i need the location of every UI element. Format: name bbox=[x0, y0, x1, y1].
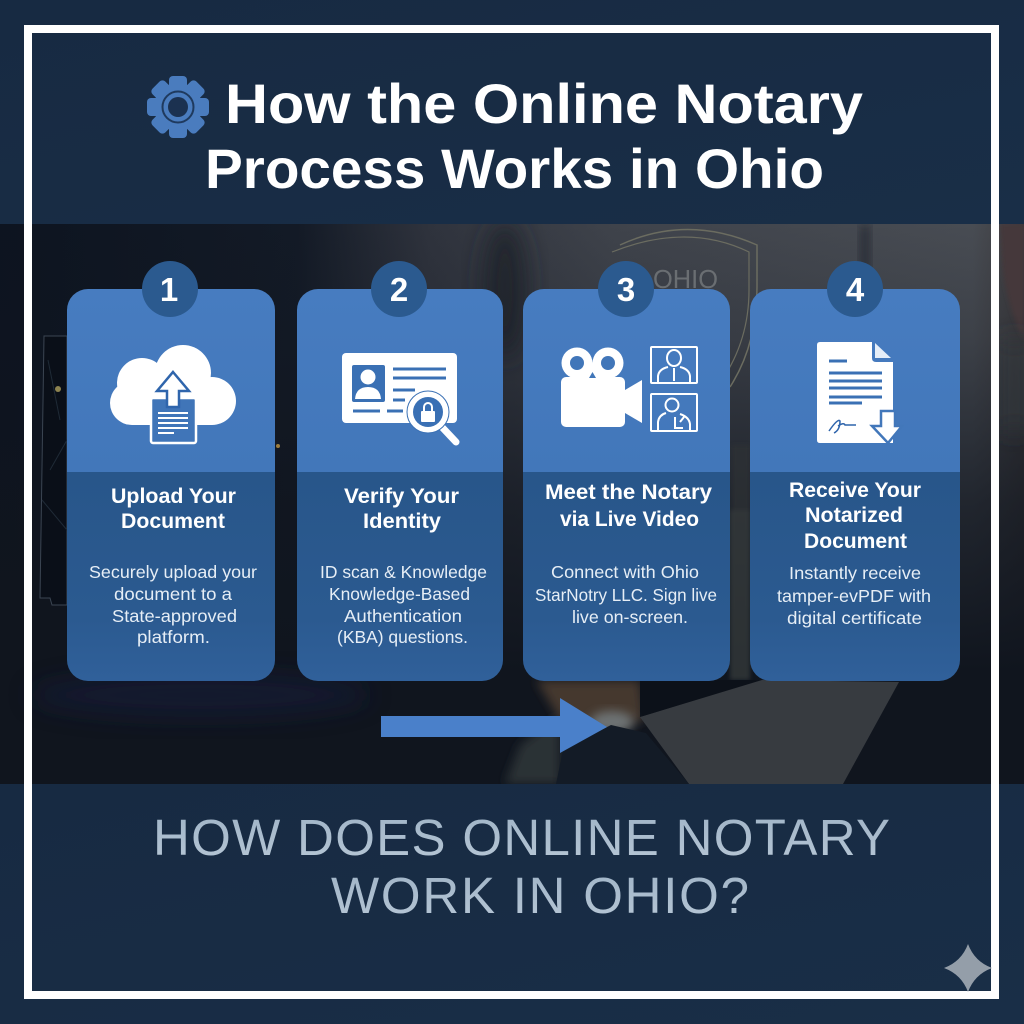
step 1 heading bbox=[111, 485, 236, 533]
step 2 heading bbox=[344, 485, 459, 533]
step 3 heading: via Live Video bbox=[560, 508, 699, 531]
step 3 description: StarNotry LLC. Sign live bbox=[535, 585, 717, 605]
step 2 heading: Verify Your bbox=[344, 485, 459, 508]
step 1 heading: Upload Your bbox=[111, 485, 236, 508]
step 3 description bbox=[535, 562, 717, 627]
step 2 number: 2 bbox=[390, 271, 408, 308]
icon: sparkle bbox=[944, 944, 992, 992]
step 1 description bbox=[89, 562, 257, 647]
icon: cloud upload document bbox=[110, 345, 236, 443]
icon: notarized document with download arrow bbox=[817, 342, 902, 443]
title bbox=[205, 72, 863, 200]
step 2 description: Authentication bbox=[344, 606, 462, 626]
panel: step 4 card bbox=[750, 261, 960, 681]
step 2 description: ID scan & Knowledge bbox=[320, 562, 487, 582]
step 4 heading: Receive Your bbox=[789, 479, 921, 502]
step 1 description: Securely upload your bbox=[89, 562, 257, 582]
step 4 description: tamper-evPDF with bbox=[777, 586, 931, 606]
step 1 description: platform. bbox=[137, 627, 210, 647]
panel: step 1 card bbox=[67, 261, 275, 681]
step 3 number bbox=[598, 261, 654, 317]
step 2 description: Knowledge-Based bbox=[329, 584, 470, 604]
step 1 description: document to a bbox=[114, 584, 232, 604]
step 4 number: 4 bbox=[846, 271, 865, 308]
step 4 description bbox=[777, 563, 931, 628]
arrow bbox=[381, 698, 607, 753]
step 2 heading: Identity bbox=[363, 510, 441, 533]
step 4 heading: Document bbox=[804, 530, 907, 553]
step 4 heading: Notarized bbox=[805, 504, 903, 527]
panel: step 2 card bbox=[297, 261, 503, 681]
step 3 heading: Meet the Notary bbox=[545, 481, 712, 504]
step 2 description bbox=[320, 562, 487, 647]
title: How the Online Notary bbox=[225, 72, 863, 135]
background photo band: OHIO bbox=[653, 264, 718, 294]
step 2 number bbox=[371, 261, 427, 317]
step 2 description: (KBA) questions. bbox=[337, 627, 468, 647]
step 1 number bbox=[142, 261, 198, 317]
icon: ID card with magnifier bbox=[342, 353, 457, 442]
bottom panel bbox=[0, 784, 1024, 1024]
background photo band bbox=[0, 220, 1024, 784]
icon: video camera with participants bbox=[561, 347, 697, 431]
step 3 heading bbox=[545, 481, 712, 531]
step 3 description: live on-screen. bbox=[572, 607, 688, 627]
icon: gear bbox=[147, 76, 209, 138]
step 4 description: Instantly receive bbox=[789, 563, 921, 583]
step 4 description: digital certificate bbox=[787, 608, 922, 628]
title: Process Works in Ohio bbox=[205, 137, 824, 200]
step 4 heading bbox=[789, 479, 921, 553]
bottom question text bbox=[153, 809, 890, 924]
step 1 description: State-approved bbox=[112, 606, 237, 626]
step 4 number bbox=[827, 261, 883, 317]
bottom question text: WORK IN OHIO? bbox=[331, 867, 749, 924]
title panel bbox=[0, 0, 1024, 224]
bottom question text: HOW DOES ONLINE NOTARY bbox=[153, 809, 890, 866]
step 1 heading: Document bbox=[121, 510, 225, 533]
step 3 number: 3 bbox=[617, 271, 635, 308]
step 1 number: 1 bbox=[160, 271, 178, 308]
panel: step 3 card bbox=[523, 261, 730, 681]
step 3 description: Connect with Ohio bbox=[551, 562, 699, 582]
